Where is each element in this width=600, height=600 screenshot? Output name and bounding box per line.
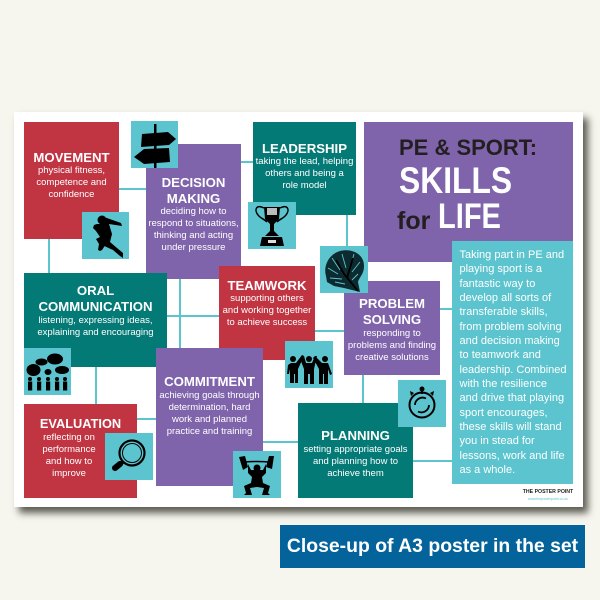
panel: decision making: MAKING [167,191,220,206]
panel: intro text [452,241,573,484]
icon: trophy [248,202,296,249]
heading: Life: LIFE [438,197,501,236]
panel: teamwork: to achieve success [227,317,307,328]
panel: oral communication: explaining and encouraging [37,327,154,338]
panel: movement: confidence [49,189,94,200]
panel: decision making [146,144,241,279]
panel: oral communication: listening, expressing ideas, [38,315,153,326]
panel: leadership [253,122,356,215]
panel: leadership: others and being a [265,168,344,179]
panel: teamwork: TEAMWORK [227,278,307,293]
panel: intro text: playing sport is a [460,263,542,275]
banner [280,525,585,568]
panel: intro text: you in stead for [460,435,535,447]
panel: problem solving [344,281,440,375]
panel: evaluation: reflecting on [43,432,95,443]
panel: commitment: work and planned [172,414,247,425]
panel: intro text: these skills will stand [460,421,562,433]
panel: intro text: leadership. Combined [460,364,567,376]
panel: commitment: COMMITMENT [164,374,255,389]
panel: teamwork: and working together [223,305,311,316]
panel: oral communication: COMMUNICATION [38,299,153,314]
panel: problem solving: problems and finding [348,340,436,351]
panel: movement: competence and [36,177,107,188]
panel: intro text: and decision making [460,335,560,347]
panel: decision making: under pressure [162,242,225,253]
panel: movement [24,122,119,239]
panel: evaluation: performance [42,444,96,455]
panel: evaluation [24,404,137,498]
panel: commitment: achieving goals through [159,390,260,401]
panel: intro text: transferable skills, [460,306,548,318]
logo: The Poster Point: www.theposterpoint.co.uk [528,497,568,501]
panel: teamwork [219,266,315,360]
icon: stopwatch [398,380,446,427]
panel: leadership: role model [282,180,327,191]
panel: problem solving: creative solutions [355,352,429,363]
panel: decision making: respond to situations, [148,218,239,229]
panel: oral communication [24,273,167,367]
icon: magnifying glass [105,433,153,480]
panel: movement: physical fitness, [38,165,105,176]
panel: title [364,122,573,262]
panel: planning: setting appropriate goals [303,444,408,455]
icon: runner [82,212,129,259]
panel: commitment: determination, hard [169,402,250,413]
heading: Skills: SKILLS [399,160,512,201]
panel: movement: MOVEMENT [33,150,110,165]
panel: leadership: LEADERSHIP [262,141,347,156]
panel: decision making: DECISION [162,175,225,190]
panel: intro text: from problem solving [460,321,562,333]
panel: planning: achieve them [327,468,384,479]
panel: problem solving: PROBLEM [359,296,425,311]
panel: planning [298,403,413,498]
panel: evaluation: improve [52,468,86,479]
icon: signpost [131,121,178,168]
panel: decision making: thinking and acting [154,230,233,241]
panel: intro text: Taking part in PE and [460,249,564,261]
panel: commitment [156,348,263,486]
panel: problem solving: SOLVING [363,312,421,327]
panel: intro text: lessons, work and life [460,450,565,462]
panel: leadership: taking the lead, helping [256,156,353,167]
icon: tree [320,246,368,293]
panel: planning: and planning how to [313,456,398,467]
panel: problem solving: responding to [363,328,421,339]
icon: speech bubbles and people [24,348,71,395]
heading: PE and Sport: PE & SPORT: [399,135,537,160]
panel: oral communication: ORAL [77,283,114,298]
banner: Close-up of A3 poster in the set [287,535,578,557]
panel: teamwork: supporting others [230,293,304,304]
panel: commitment: practice and training [167,426,252,437]
logo: The Poster Point [522,489,574,501]
heading: for: for [397,207,430,235]
icon: team [285,341,333,388]
panel: evaluation: EVALUATION [40,416,121,431]
panel: evaluation: and how to [46,456,92,467]
panel: intro text: as a whole. [460,464,515,476]
panel: intro text: to teamwork and [460,349,541,361]
poster sheet [14,112,583,507]
panel: intro text: and drive that playing [460,392,564,404]
logo: The Poster Point: THE POSTER POINT [523,489,573,495]
panel: planning: PLANNING [321,428,390,443]
panel: intro text: fantastic way to [460,278,535,290]
panel: decision making: deciding how to [160,206,227,217]
panel: intro text: with the resilience [460,378,547,390]
panel: intro text: develop all sorts of [460,292,551,304]
panel: intro text: sport encourages, [460,407,548,419]
icon: weightlifter [233,451,281,498]
